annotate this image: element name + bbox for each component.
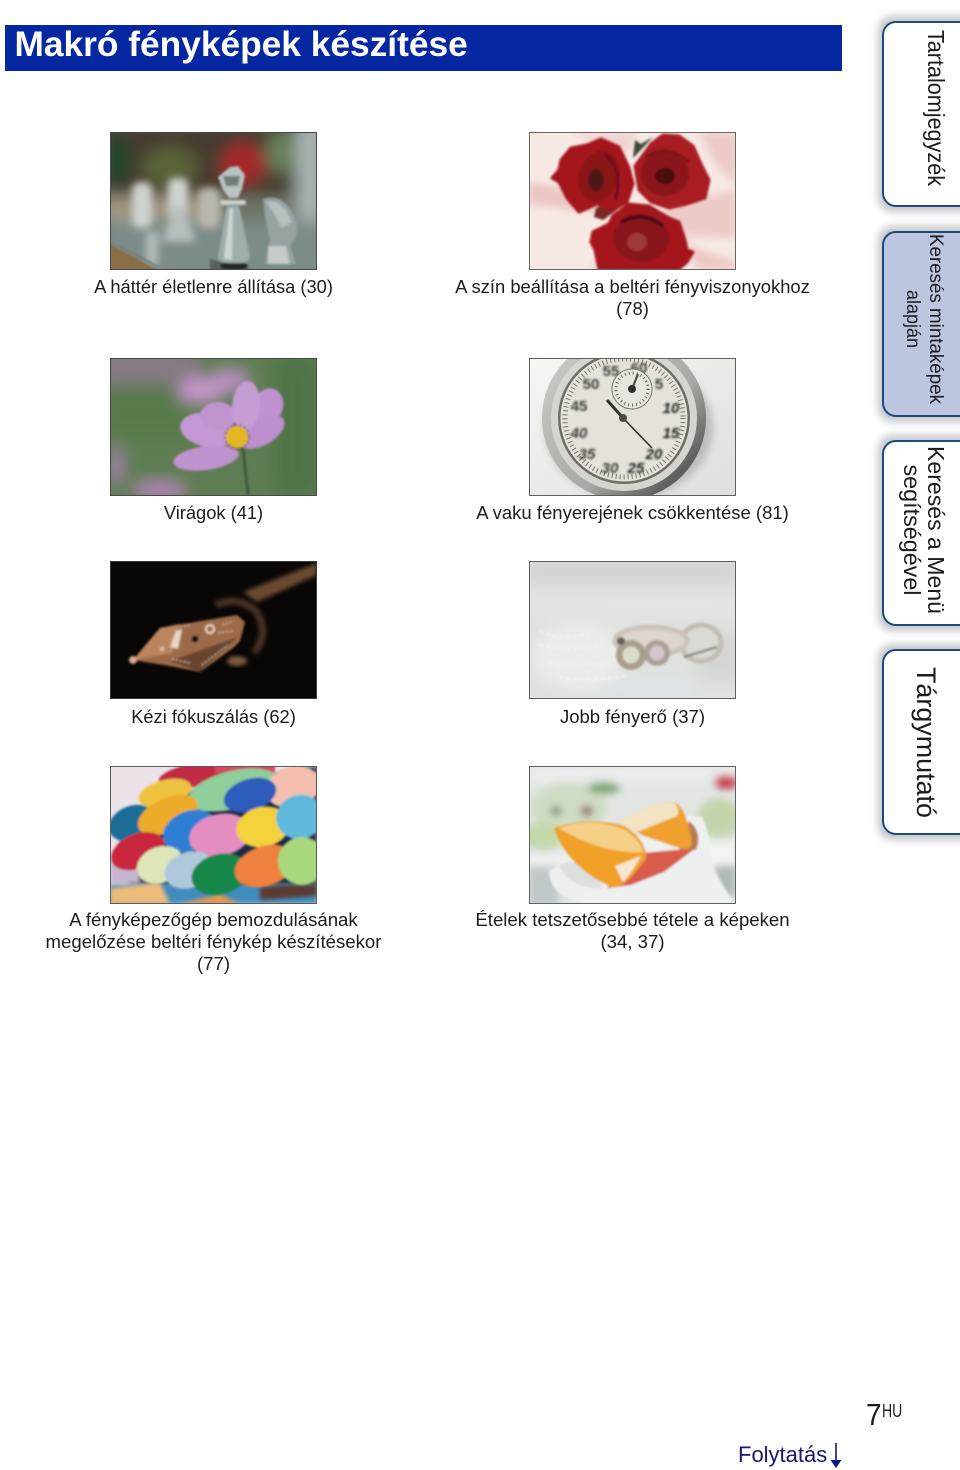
navigation tabs (874, 12, 960, 844)
photo: stopwatch: 55 (603, 363, 619, 380)
tab: Keresés mintaképek alapján: alapján (902, 290, 924, 348)
caption: flowers: Virágok (41) (164, 502, 263, 523)
continue link with arrow: Folytatás (738, 1442, 827, 1467)
photo: glass chess pieces (110, 132, 317, 270)
page number: 7 (866, 1397, 882, 1432)
photo: diamond rings (529, 561, 736, 699)
caption: better brightness: Jobb fényerő (37) (560, 706, 705, 727)
photo: stopwatch: 20 (645, 446, 663, 463)
photo: stopwatch: 15 (663, 425, 680, 442)
photo: stopwatch: 35 (579, 446, 596, 463)
tab: Tartalomjegyzék: Tartalomjegyzék (923, 30, 949, 186)
photo: red roses (529, 132, 736, 270)
photo: stopwatch: 60 (631, 360, 647, 377)
caption: food photos: (34, 37) (600, 931, 665, 952)
photo: stopwatch: 5 (655, 376, 663, 393)
caption: avoiding camera shake: (77) (197, 953, 230, 974)
photo: stopwatch: 30 (602, 460, 619, 477)
icon: down arrow (830, 1443, 842, 1468)
photo: crayons (110, 766, 317, 904)
photo: fountain pen nib (110, 561, 317, 699)
caption: indoor colour setting (455, 276, 810, 319)
title bar (5, 25, 842, 71)
photo: stopwatch: 45 (571, 398, 587, 415)
tab: Tárgymutató (878, 644, 960, 840)
caption: avoiding camera shake (46, 909, 382, 974)
tab: Tartalomjegyzék (878, 16, 960, 212)
photo: stopwatch: 10 (663, 400, 680, 417)
photo: stopwatch: 40 (570, 425, 588, 442)
tab: Keresés a Menü segítségével: segítségével (899, 464, 925, 596)
tab: Keresés mintaképek alapján: Keresés mintaképek (925, 234, 947, 404)
caption: avoiding camera shake: megelőzése beltéri fénykép készítésekor (46, 931, 381, 952)
caption: avoiding camera shake: A fényképezőgép bemozdulásának (69, 909, 358, 930)
caption: food photos (475, 909, 790, 952)
page number: HU (882, 1401, 902, 1421)
tab: Keresés mintaképek alapján (878, 226, 960, 422)
photo: pink cosmos flower (110, 358, 317, 496)
tab: Tárgymutató: Tárgymutató (911, 667, 941, 818)
caption: food photos: Ételek tetszetősebbé tétele a képeken (475, 909, 790, 930)
caption: manual focus: Kézi fókuszálás (62) (131, 706, 296, 727)
photo: stopwatch: 25 (627, 460, 645, 477)
caption: indoor colour setting: A szín beállítása a beltéri fényviszonyokhoz (455, 276, 810, 297)
caption: background blur: A háttér életlenre állítása (30) (94, 276, 333, 297)
photo: stopwatch: 50 (583, 376, 599, 393)
page number (866, 1397, 902, 1432)
caption: flash reduction: A vaku fényerejének csökkentése (81) (476, 502, 789, 523)
caption: indoor colour setting: (78) (616, 298, 649, 319)
photo: stopwatch (529, 358, 736, 496)
photo: orange slices in a bowl (529, 766, 736, 904)
tab: Keresés a Menü segítségével (878, 435, 960, 631)
tab: Keresés a Menü segítségével: Keresés a Menü (923, 446, 949, 614)
title: Makró fényképek készítése (14, 25, 468, 64)
